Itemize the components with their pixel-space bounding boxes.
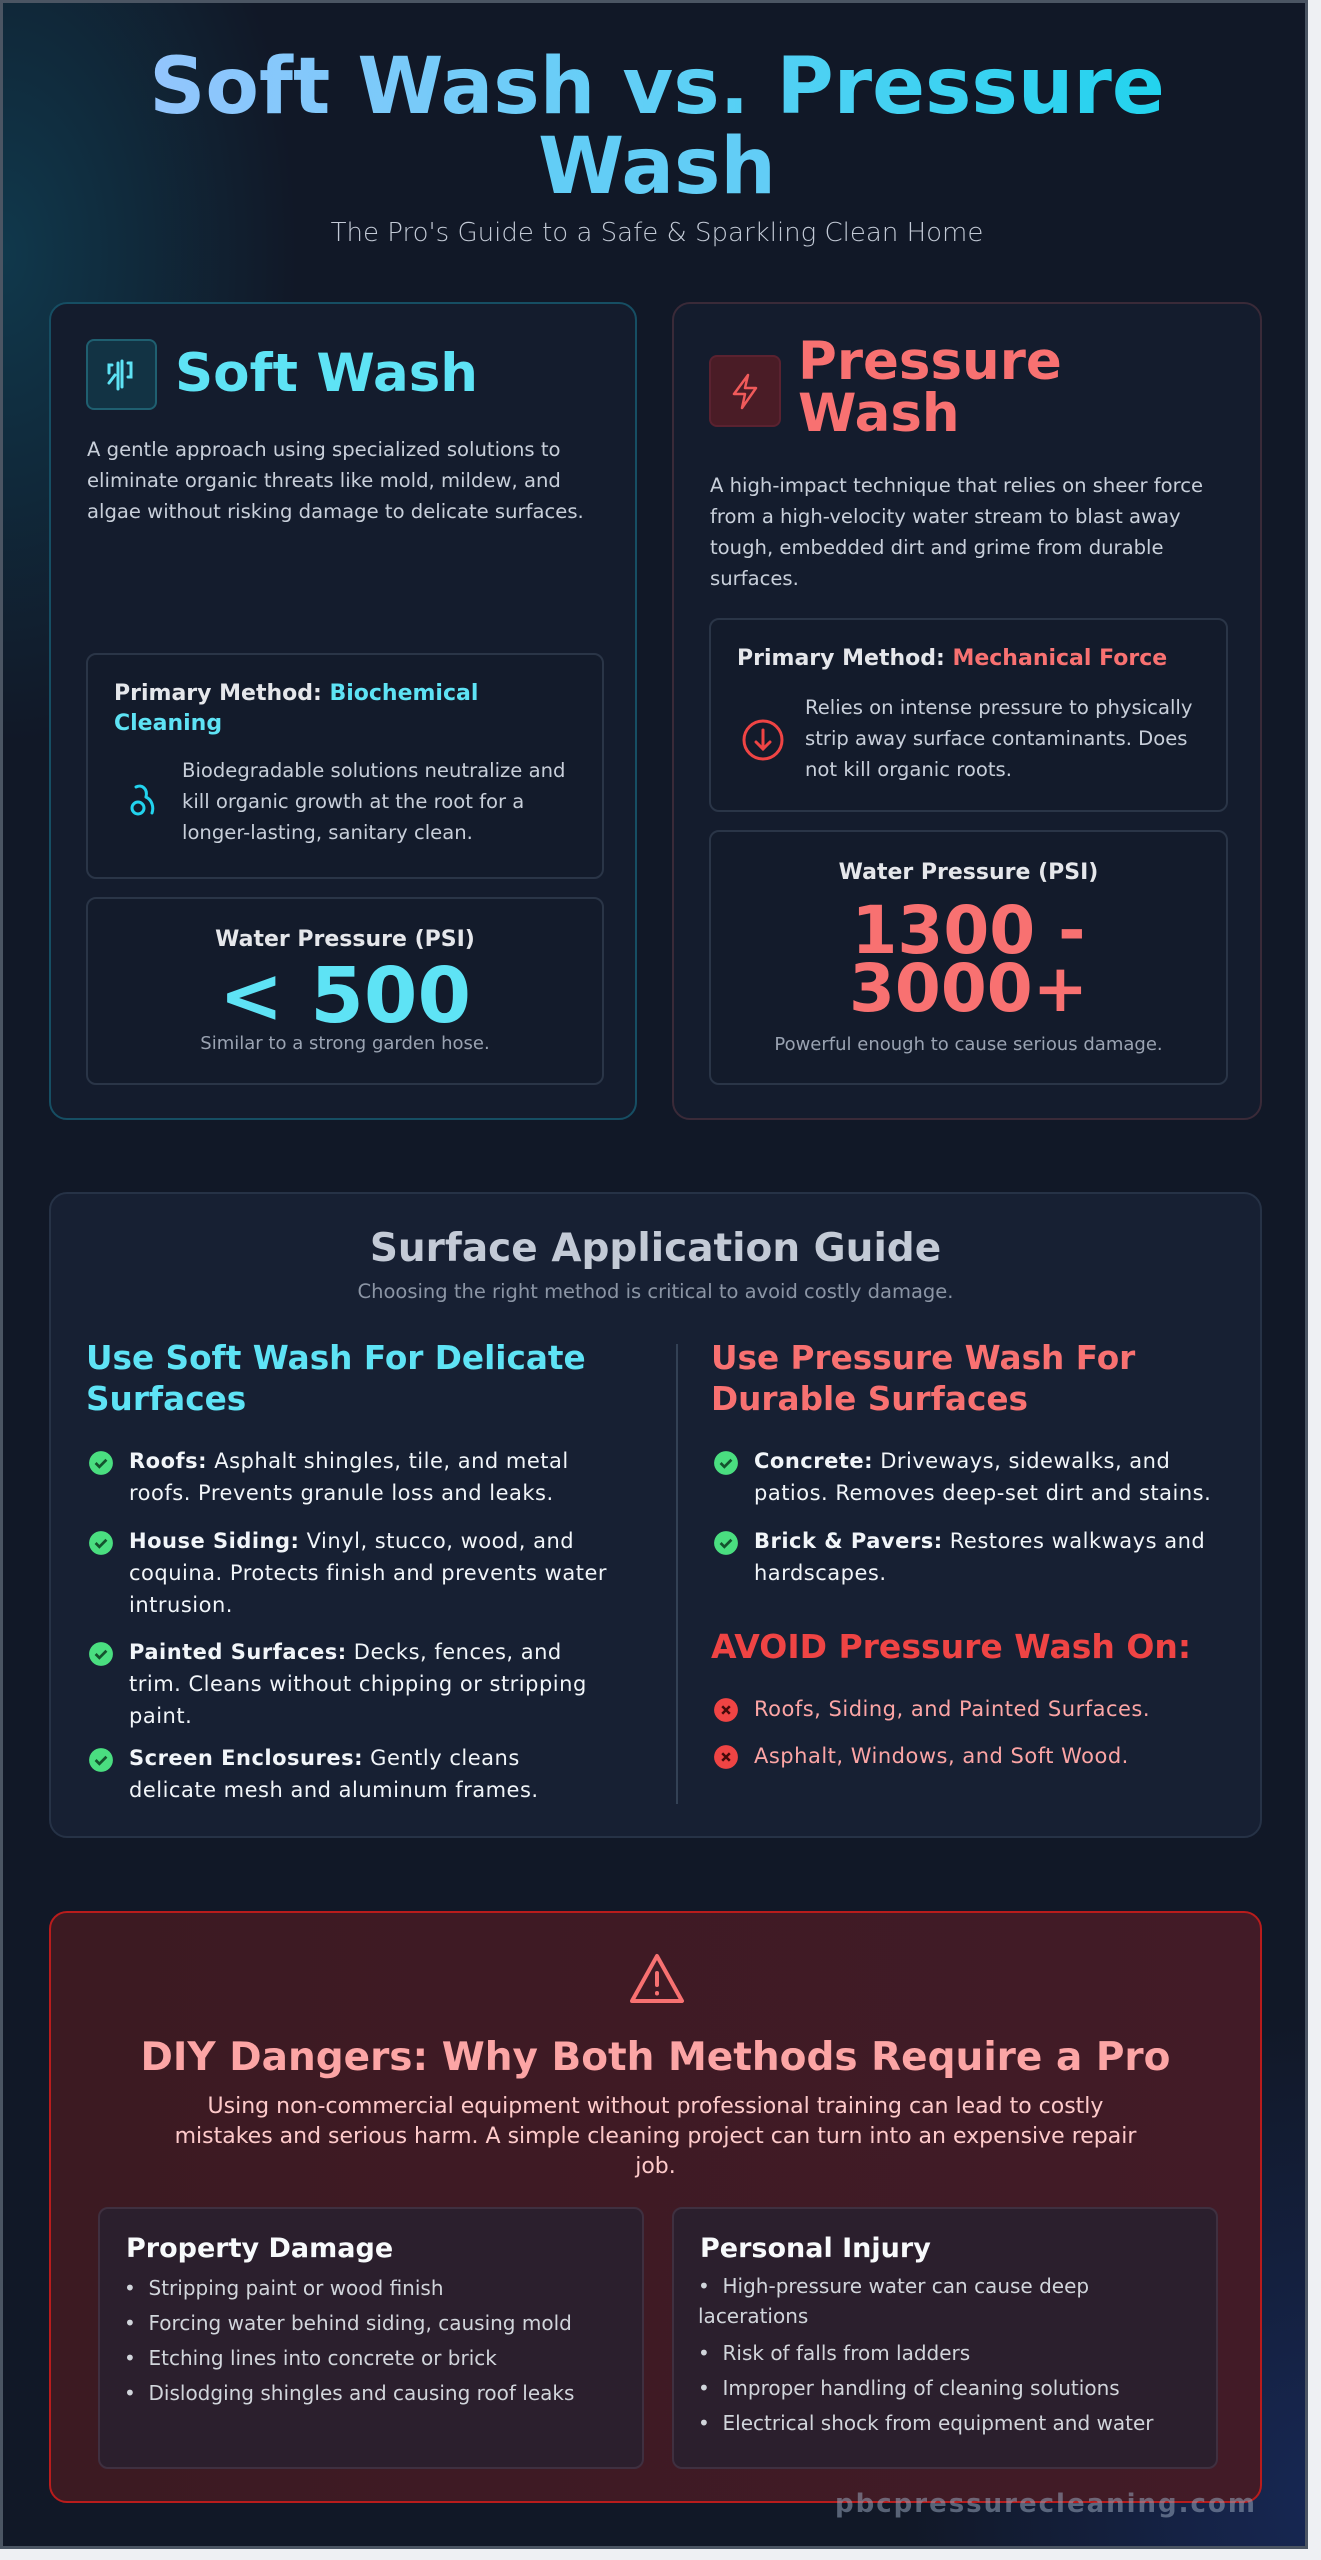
card list: • Stripping paint or wood finish	[124, 2276, 444, 2300]
subtitle: The Pro's Guide to a Safe & Sparkling Clean Home	[331, 218, 983, 248]
icon: drop	[130, 784, 154, 816]
item: brick: Brick & Pavers: Restores walkways and	[754, 1529, 1205, 1553]
avoid item 2: Asphalt, Windows, and Soft Wood.	[754, 1744, 1129, 1768]
card list	[124, 2276, 574, 2405]
diy description	[175, 2094, 1136, 2179]
column heading	[711, 1339, 1136, 1418]
panel: surface application guide	[49, 1192, 1262, 1838]
diy description: mistakes and serious harm. A simple cleaning project can turn into an expensive repair	[175, 2124, 1136, 2149]
card list	[698, 2274, 1154, 2435]
section title: Surface Application Guide	[370, 1226, 941, 1271]
heading: pressure wash	[798, 331, 1062, 444]
item: house siding: House Siding: Vinyl, stucco, wood, and	[129, 1529, 574, 1553]
diy description: Using non-commercial equipment without professional training can lead to costly	[208, 2094, 1103, 2119]
avoid heading: AVOID Pressure Wash On:	[711, 1627, 1191, 1666]
item: house siding: coquina. Protects finish and prevents water	[129, 1561, 607, 1585]
card list: • Etching lines into concrete or brick	[124, 2346, 497, 2370]
icon: sprayer	[86, 339, 157, 410]
card heading: Personal Injury	[700, 2233, 931, 2264]
heading: pressure wash: Pressure	[798, 331, 1062, 392]
item: brick	[714, 1529, 1205, 1585]
item: painted surfaces: trim. Cleans without chipping or stripping	[129, 1672, 587, 1696]
footer: website: pbcpressurecleaning.com	[835, 2489, 1257, 2519]
psi box	[86, 897, 604, 1085]
title: Soft Wash vs. Pressure	[149, 42, 1165, 132]
description: tough, embedded dirt and grime from durable	[710, 536, 1164, 559]
title: Wash	[538, 122, 776, 212]
description: A high-impact technique that relies on sheer force	[710, 474, 1203, 497]
card heading: Property Damage	[126, 2233, 393, 2264]
avoid item 1: Roofs, Siding, and Painted Surfaces.	[754, 1697, 1150, 1721]
psi value	[849, 892, 1088, 1027]
diy title: DIY Dangers: Why Both Methods Require a Pro	[141, 2035, 1170, 2080]
column heading: Use Pressure Wash For	[711, 1339, 1135, 1377]
soft wash column	[86, 1339, 607, 1802]
column heading: Use Soft Wash For Delicate	[86, 1339, 586, 1377]
title	[149, 42, 1165, 212]
item: house siding	[89, 1529, 607, 1617]
section subtitle: Choosing the right method is critical to avoid costly damage.	[358, 1280, 954, 1303]
panel: pressure wash	[672, 302, 1262, 1120]
item: concrete	[714, 1449, 1211, 1505]
method title: Primary Method: Biochemical	[114, 681, 478, 706]
psi value: 1300 -	[851, 892, 1086, 969]
item: house siding: intrusion.	[129, 1593, 233, 1617]
column heading: Durable Surfaces	[711, 1380, 1028, 1418]
psi value: 3000+	[849, 950, 1088, 1027]
diy description: job.	[635, 2154, 676, 2179]
method title: Cleaning	[114, 711, 222, 736]
method text	[805, 696, 1192, 781]
card list: • Forcing water behind siding, causing mold	[124, 2311, 572, 2335]
column heading: Surfaces	[86, 1380, 246, 1418]
item: screen enclosures: delicate mesh and aluminum frames.	[129, 1778, 539, 1802]
psi value: < 500	[219, 952, 471, 1041]
pressure wash column	[711, 1339, 1211, 1769]
column heading	[86, 1339, 586, 1418]
method title	[114, 681, 478, 736]
method text: Biodegradable solutions neutralize and	[182, 759, 565, 782]
item: roofs	[89, 1449, 569, 1505]
icon: down arrow circle	[742, 720, 784, 760]
description: algae without risking damage to delicate surfaces.	[87, 500, 584, 523]
heading: soft wash: Soft Wash	[175, 343, 478, 404]
item: painted surfaces	[89, 1640, 587, 1728]
item: roofs: roofs. Prevents granule loss and leaks.	[129, 1481, 554, 1505]
psi box	[709, 830, 1228, 1085]
description	[710, 474, 1203, 590]
item: screen enclosures: Screen Enclosures: Gently cleans	[129, 1746, 520, 1770]
description: surfaces.	[710, 567, 799, 590]
method text: strip away surface contaminants. Does	[805, 727, 1188, 750]
item: roofs: Roofs: Asphalt shingles, tile, and metal	[129, 1449, 569, 1473]
method box	[709, 618, 1228, 812]
heading: pressure wash: Wash	[798, 383, 960, 444]
method title: Primary Method: Mechanical Force	[737, 646, 1167, 671]
psi caption: Powerful enough to cause serious damage.	[774, 1034, 1163, 1055]
psi caption: Similar to a strong garden hose.	[200, 1033, 490, 1054]
item: screen enclosures	[89, 1746, 539, 1802]
card list: • High-pressure water can cause deep	[698, 2274, 1089, 2298]
icon: warning	[630, 1954, 684, 2003]
method text: not kill organic roots.	[805, 758, 1012, 781]
description	[87, 438, 584, 523]
item: painted surfaces: paint.	[129, 1704, 192, 1728]
card: personal injury	[672, 2207, 1218, 2469]
description: A gentle approach using specialized solutions to	[87, 438, 561, 461]
description: eliminate organic threats like mold, mildew, and	[87, 469, 561, 492]
psi label: Water Pressure (PSI)	[839, 860, 1098, 885]
card list: • Risk of falls from ladders	[698, 2341, 970, 2365]
psi label: Water Pressure (PSI)	[215, 927, 475, 952]
description: from a high-velocity water stream to blast away	[710, 505, 1181, 528]
method text: longer-lasting, sanitary clean.	[182, 821, 473, 844]
card list: lacerations	[698, 2304, 808, 2328]
card list: • Dislodging shingles and causing roof leaks	[124, 2381, 574, 2405]
card list: • Electrical shock from equipment and water	[698, 2411, 1154, 2435]
method text: Relies on intense pressure to physically	[805, 696, 1192, 719]
panel: diy dangers	[49, 1911, 1262, 2503]
item: concrete: patios. Removes deep-set dirt and stains.	[754, 1481, 1211, 1505]
card list: • Improper handling of cleaning solutions	[698, 2376, 1120, 2400]
item: concrete: Concrete: Driveways, sidewalks, and	[754, 1449, 1170, 1473]
method box	[86, 653, 604, 879]
method text: kill organic growth at the root for a	[182, 790, 524, 813]
item: brick: hardscapes.	[754, 1561, 886, 1585]
card: property damage	[98, 2207, 644, 2469]
icon: lightning	[709, 355, 781, 427]
method text	[182, 759, 565, 844]
panel: soft wash	[49, 302, 637, 1120]
item: painted surfaces: Painted Surfaces: Decks, fences, and	[129, 1640, 562, 1664]
